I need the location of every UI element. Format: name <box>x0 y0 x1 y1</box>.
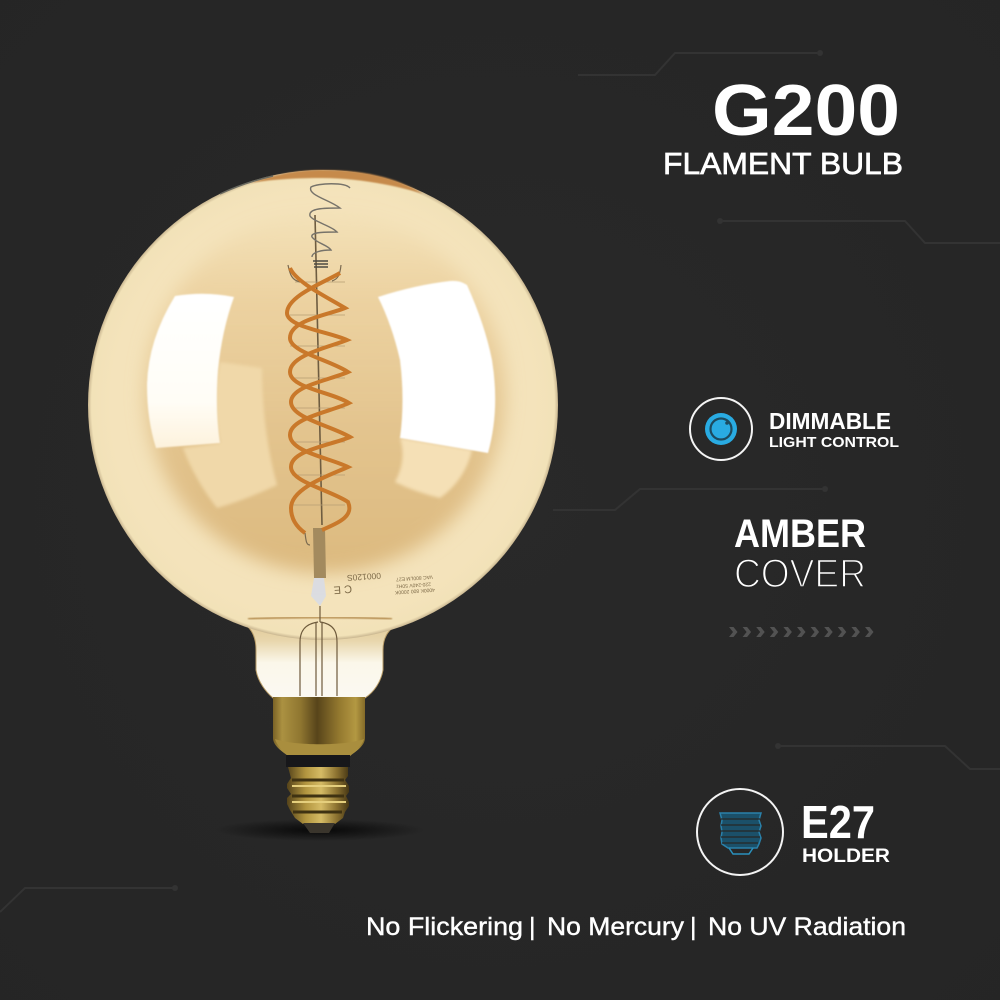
orange filament strand A <box>290 268 350 530</box>
circuit line: middle <box>553 486 828 510</box>
base contact tip <box>303 823 335 833</box>
thin top spiral <box>310 184 350 257</box>
circuit line: lower right <box>775 743 1000 769</box>
icon: dimmable <box>690 398 752 460</box>
brass collar <box>273 697 365 756</box>
glass printed marks: 220-240V 50Hz <box>396 581 431 589</box>
top rim band <box>250 170 423 194</box>
glass printed marks: C E <box>333 582 352 596</box>
darker inner lens <box>145 213 505 573</box>
screw base <box>287 767 349 824</box>
label: cover: COVER <box>734 552 866 596</box>
right lower pane <box>395 438 472 498</box>
subtitle: filament bulb: FLAMENT BULB <box>663 146 903 181</box>
feature line: No Mercury <box>547 913 685 941</box>
glass stem tube <box>313 528 326 578</box>
thin support rings <box>290 282 345 505</box>
filament stem <box>315 215 322 525</box>
orange filament strand B <box>287 273 349 533</box>
feature line: | <box>690 913 696 941</box>
bulb illustration <box>88 170 558 841</box>
brass collar chamfer <box>275 739 364 756</box>
left window reflection <box>147 294 234 448</box>
glass printed marks: VAC 800LM E27 <box>396 573 433 582</box>
stem glass tip <box>311 578 326 606</box>
glass printed marks: 000120S <box>346 571 381 583</box>
support wires <box>300 606 337 696</box>
circuit line: bottom left <box>0 885 178 912</box>
glass neck <box>232 610 412 698</box>
label: holder: HOLDER <box>802 846 890 867</box>
circuit line: upper right <box>717 218 1000 243</box>
neck seam <box>248 618 392 619</box>
label: E27: E27 <box>801 796 875 848</box>
feature line: | <box>529 913 536 941</box>
label: amber: AMBER <box>734 512 866 556</box>
feature line <box>366 913 906 941</box>
label: dimmable: DIMMABLE <box>769 408 891 434</box>
side hooks <box>288 265 341 545</box>
screw thread highlights <box>292 786 346 802</box>
right window reflection <box>378 281 495 453</box>
floor shadow <box>215 819 425 841</box>
icon: E27 socket <box>697 789 783 875</box>
screw thread shadows <box>292 780 344 812</box>
glass globe <box>88 170 558 640</box>
chevron row <box>729 627 874 637</box>
glass printed marks <box>333 571 435 596</box>
left lower pane <box>183 362 277 508</box>
title: G200: G200 <box>712 71 900 151</box>
circuit line: top <box>578 50 823 75</box>
feature line: No Flickering <box>366 913 523 941</box>
glass printed marks: 4000K 800 2000K <box>394 586 435 595</box>
coil <box>313 261 328 267</box>
label: light control: LIGHT CONTROL <box>769 434 899 451</box>
black ring <box>286 755 350 767</box>
top left rim shadow <box>220 176 273 194</box>
feature line: No UV Radiation <box>708 913 906 941</box>
